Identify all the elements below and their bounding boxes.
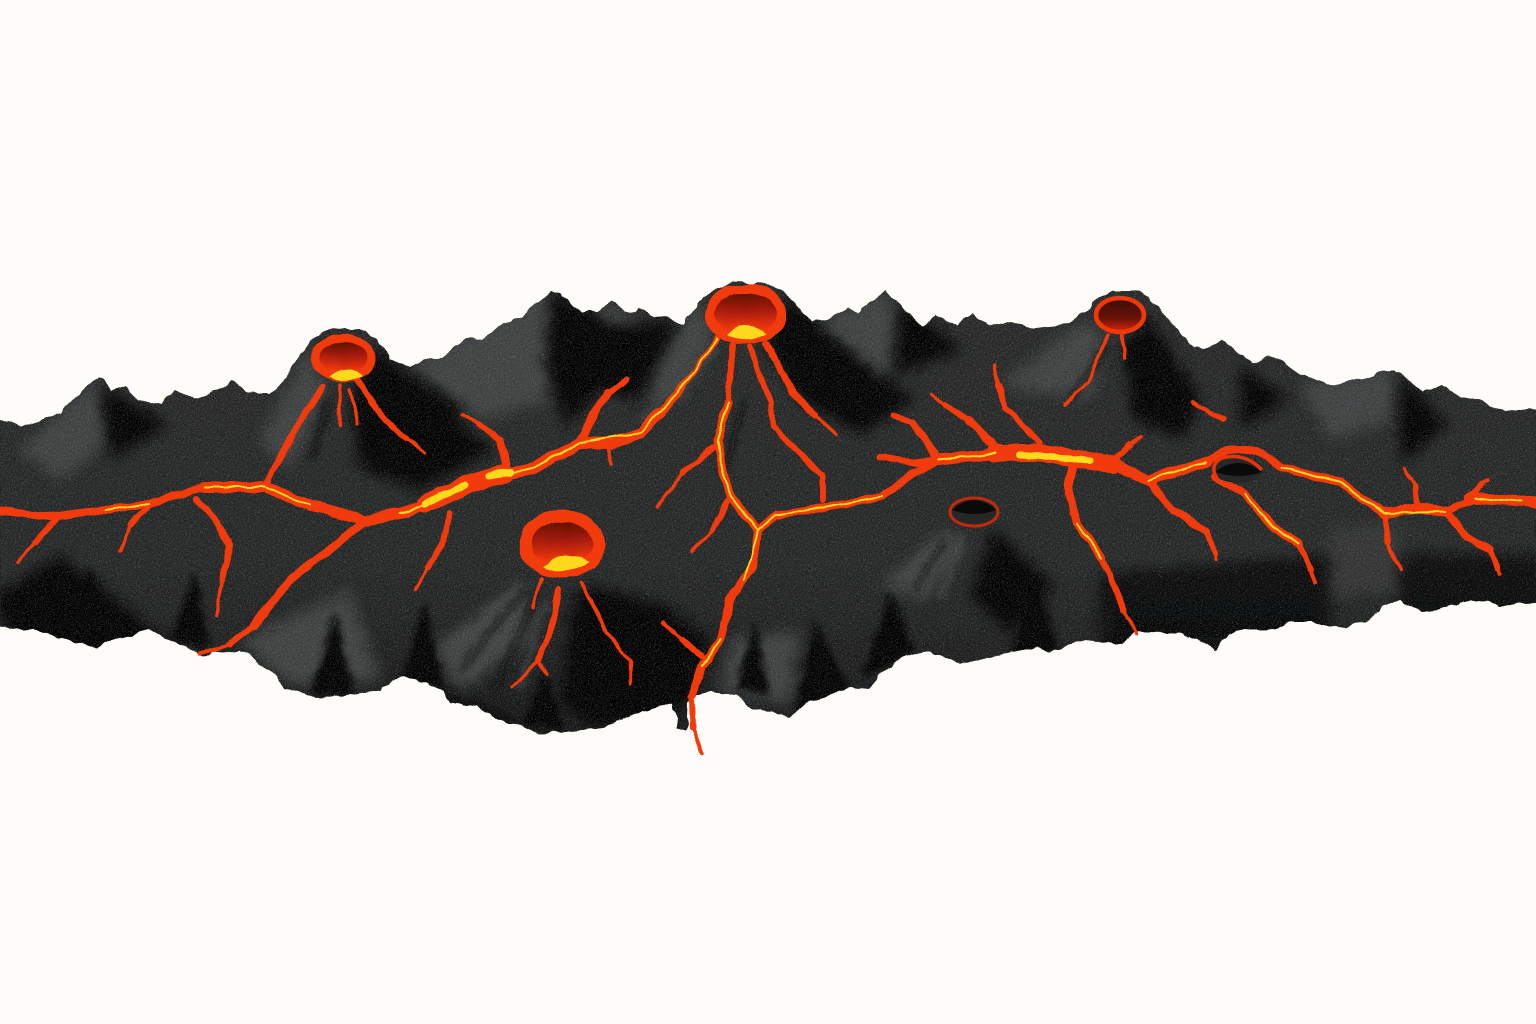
hairline tips bbox=[18, 335, 1499, 755]
crater: dormant volcano bbox=[950, 498, 998, 526]
crater: front volcano bbox=[525, 516, 599, 572]
crater: dormant vent on right bbox=[1213, 456, 1263, 483]
crater: left volcano bbox=[315, 338, 371, 380]
molten yellow core lines bbox=[105, 338, 1520, 667]
terrain: dark mountain range bbox=[0, 270, 1536, 750]
surface grain bbox=[0, 270, 1536, 750]
crater: right volcano bbox=[1096, 298, 1144, 332]
lower ridge streaks bbox=[60, 565, 1060, 730]
main trunk sections bbox=[205, 413, 1536, 520]
widest trunk sections bbox=[425, 453, 1112, 504]
volcano flank striations bbox=[472, 352, 964, 692]
deep shadows bbox=[0, 290, 1536, 735]
crater: central volcano bbox=[710, 289, 782, 340]
narrow flows bbox=[35, 338, 1497, 727]
illustration: volcanic mountain range with lava rivers bbox=[0, 281, 1536, 756]
lava rivers bbox=[0, 335, 1536, 755]
lit flanks bbox=[20, 290, 1400, 705]
medium flows bbox=[0, 387, 1491, 697]
